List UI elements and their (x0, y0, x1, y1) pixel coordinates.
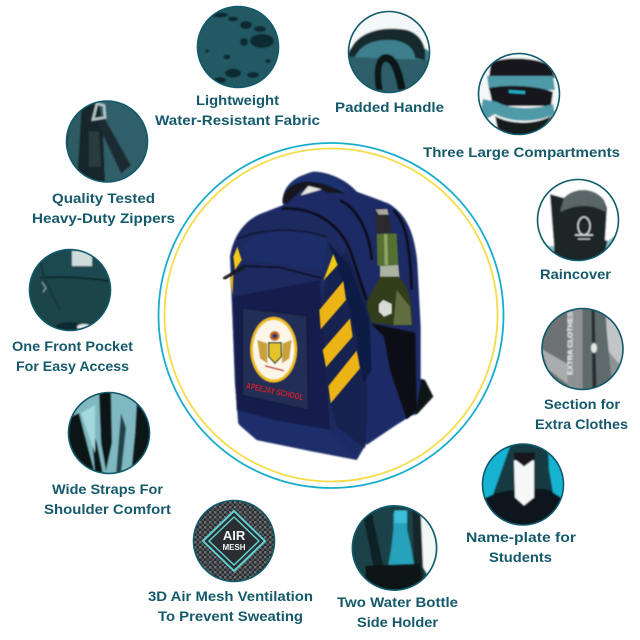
feature: front pocket (12, 249, 133, 374)
label (12, 338, 133, 374)
zips (282, 209, 367, 300)
photo: air mesh: AIR (223, 528, 246, 543)
photo: compartments (478, 53, 560, 135)
label: Name-plate for (466, 529, 577, 545)
label: To Prevent Sweating (158, 608, 303, 624)
label (155, 92, 320, 128)
photo: raincover (537, 179, 619, 261)
label: For Easy Access (16, 358, 129, 374)
inner yellow ring (164, 148, 498, 482)
label: 3D Air Mesh Ventilation (148, 588, 313, 604)
feature: padded handle (335, 11, 444, 115)
side strap (327, 240, 372, 383)
photo: extra clothes: EXTRA CLOTHES (566, 312, 574, 375)
bottle body (367, 277, 413, 326)
feature: wide straps (44, 392, 171, 517)
label (32, 190, 175, 226)
school name: APEEJAY SCHOOL (245, 380, 305, 402)
upper pocket highlight (243, 232, 327, 270)
photo: zipper (66, 100, 148, 182)
label: Heavy-Duty Zippers (32, 210, 175, 226)
photo: handle (348, 11, 430, 93)
bottle cap (375, 209, 392, 233)
feature: raincover (537, 179, 619, 282)
label (466, 529, 577, 565)
feature: 3D air mesh (148, 500, 313, 624)
bottle (367, 209, 413, 326)
backpack illustration (223, 172, 433, 460)
label: Shoulder Comfort (44, 501, 171, 517)
rear black foot strap (407, 377, 433, 417)
label (337, 594, 458, 630)
feature: heavy-duty zippers (32, 100, 175, 226)
feature: extra clothes section (535, 308, 628, 432)
yellow side stripes (230, 247, 360, 403)
label (44, 481, 171, 517)
lower front shade (233, 280, 330, 430)
label (148, 588, 313, 624)
school badge patch (243, 308, 308, 410)
zip pull (223, 267, 245, 279)
bottle mesh pocket (371, 323, 417, 419)
bottle neck (377, 233, 398, 266)
label: Side Holder (357, 614, 439, 630)
photo: fabric (197, 6, 279, 88)
label: Padded Handle (335, 99, 444, 115)
top handle (283, 173, 348, 203)
label: Lightweight (196, 92, 279, 108)
label: Students (489, 549, 552, 565)
school crest (250, 317, 297, 382)
label: Water-Resistant Fabric (155, 112, 320, 128)
label: One Front Pocket (12, 338, 133, 354)
label: Raincover (540, 266, 612, 282)
side panel (322, 250, 370, 448)
feature: lightweight water-resistant fabric (155, 6, 320, 128)
feature: three compartments (423, 53, 620, 160)
label: Three Large Compartments (423, 144, 620, 160)
photo: pocket (29, 249, 111, 331)
backpack body (230, 172, 421, 460)
label: Two Water Bottle (337, 594, 458, 610)
outer blue ring (158, 143, 504, 488)
label: Quality Tested (52, 190, 155, 206)
photo: air mesh (193, 500, 275, 582)
label: Section for (544, 396, 621, 412)
feature: name-plate (466, 444, 577, 565)
photo: bottle holder (352, 505, 437, 591)
feature: water bottle holder (337, 505, 458, 630)
label (535, 396, 628, 432)
label: Extra Clothes (535, 416, 628, 432)
front panel (231, 212, 347, 443)
photo: straps (68, 392, 150, 474)
label: Wide Straps For (52, 481, 164, 497)
photo: air mesh: MESH (222, 543, 246, 552)
photo: name-plate (482, 444, 564, 526)
